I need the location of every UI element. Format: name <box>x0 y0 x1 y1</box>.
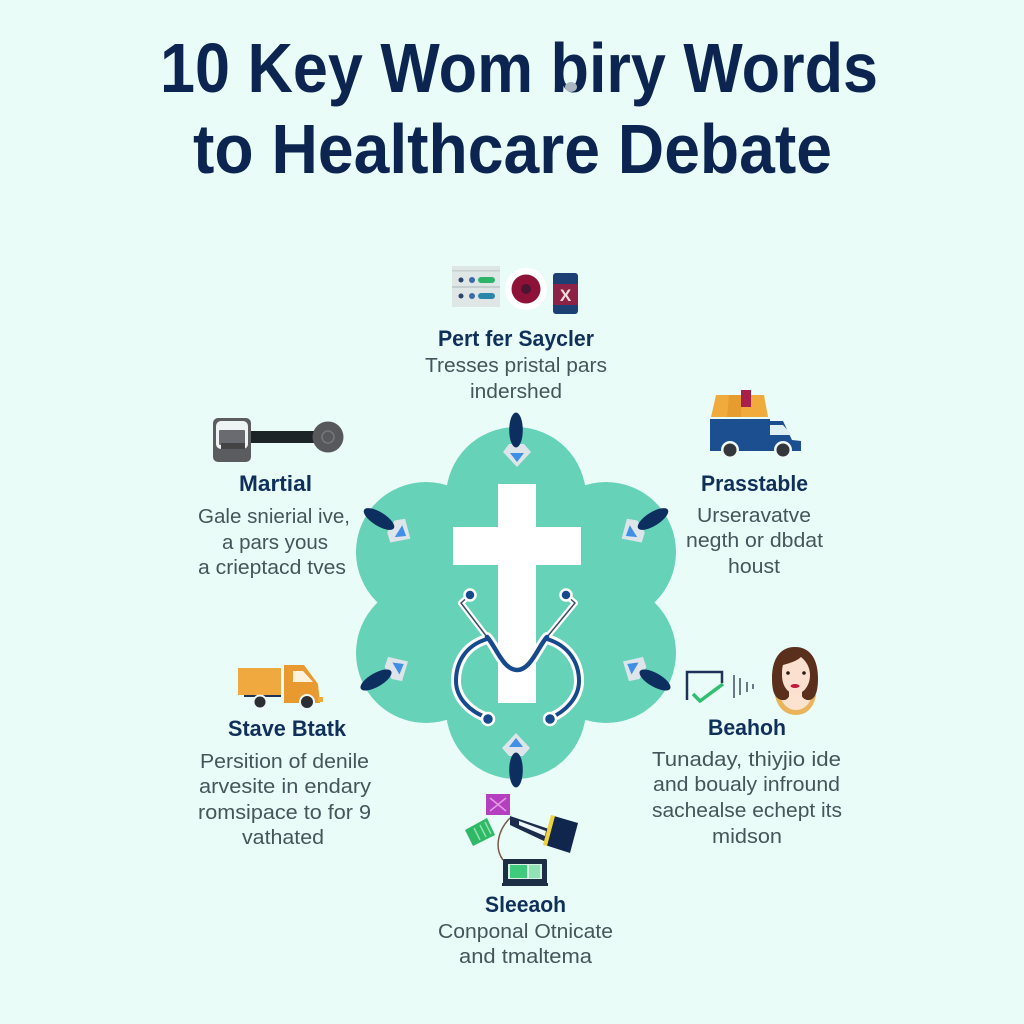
description: negth or dbdat <box>686 530 823 552</box>
panel: Martial <box>198 418 350 579</box>
arrow: top <box>503 412 531 467</box>
description: Persition of denile <box>200 751 369 773</box>
heading: Beahoh <box>708 715 786 740</box>
description: and boualy infround <box>653 774 840 796</box>
description: midson <box>712 826 782 848</box>
heading: Stave Btatk <box>228 716 347 741</box>
heading: Prasstable <box>701 471 808 496</box>
description: Tresses pristal pars <box>425 355 607 377</box>
title: 10 Key Wom biry Words <box>160 29 878 107</box>
description <box>198 506 350 579</box>
description <box>425 355 607 403</box>
description: houst <box>728 556 780 578</box>
description: a pars yous <box>222 532 328 554</box>
description: Conponal Otnicate <box>438 921 613 943</box>
description <box>438 921 613 968</box>
white cross <box>453 484 581 703</box>
arrow: upper right <box>614 498 675 550</box>
heading: Martial <box>239 471 312 496</box>
title <box>160 29 878 188</box>
panel: Beahoh <box>652 647 842 848</box>
description: arvesite in endary <box>199 776 371 798</box>
title: to Healthcare Debate <box>193 110 832 188</box>
arrow: bottom <box>502 733 530 788</box>
arrow: lower right <box>616 649 677 701</box>
description: Urseravatve <box>697 505 811 527</box>
heading: Sleeaoh <box>485 892 566 917</box>
icon: plug, chips and laptop <box>465 794 578 886</box>
description: romsipace to for 9 <box>198 802 371 824</box>
description: Gale snierial ive, <box>198 506 350 528</box>
arrow: upper left <box>357 498 418 550</box>
description: sachealse echept its <box>652 800 842 822</box>
panel: Prasstable <box>686 390 823 578</box>
description: and tmaltema <box>459 946 593 968</box>
arrow: lower left <box>354 649 415 701</box>
panel: Stave Btatk <box>198 665 371 849</box>
description: Tunaday, thiyjio ide <box>652 749 841 771</box>
stethoscope <box>456 590 579 725</box>
icon: server, badge and phone: X <box>560 286 572 305</box>
icon: checkbox with sound bars <box>687 672 753 701</box>
description <box>198 751 371 849</box>
icon: server, badge and phone <box>452 266 578 314</box>
flower shape <box>356 427 676 779</box>
panel: Sleeaoh <box>438 794 613 968</box>
icon: machine with handle <box>213 418 344 462</box>
central flower with cross and stethoscope <box>356 427 676 779</box>
icon: orange truck <box>238 665 323 710</box>
description: vathated <box>242 827 324 849</box>
description <box>652 749 842 848</box>
heading: Pert fer Saycler <box>438 326 594 351</box>
description: indershed <box>470 381 562 403</box>
description <box>686 505 823 578</box>
panel: top item <box>425 266 607 403</box>
description: a crieptacd tves <box>198 557 346 579</box>
icon: delivery van with box <box>710 390 801 459</box>
icon: woman portrait <box>772 647 818 715</box>
